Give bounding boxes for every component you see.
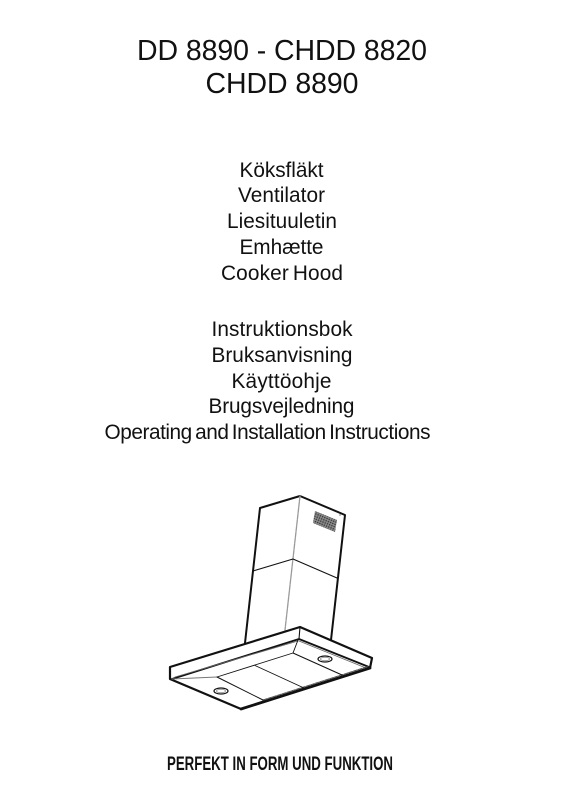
product names: Ventilator [238,184,325,207]
manual titles: Brugsvejledning [208,395,354,418]
product names: Emhætte [240,236,324,259]
manual titles: Instruktionsbok [212,318,353,341]
vent ring left [214,688,228,694]
manual titles: Operating and Installation Instructions [104,421,430,444]
title: DD 8890 - CHDD 8820 [137,35,427,67]
product names: Cooker Hood [221,262,343,285]
vent ring right [318,656,332,662]
product names [221,159,343,285]
chimney [245,496,345,643]
manual titles: Bruksanvisning [212,344,352,367]
manual titles [104,318,430,444]
product names: Liesituuletin [227,210,337,233]
canopy [170,627,372,709]
manual titles: Käyttöohje [232,370,332,393]
ventilation grille [313,511,341,532]
title [137,35,427,100]
product names: Köksfläkt [240,159,324,182]
title: CHDD 8890 [206,68,358,100]
illustration: cooker hood [170,496,372,709]
slogan: PERFEKT IN FORM UND FUNKTION [167,754,393,775]
